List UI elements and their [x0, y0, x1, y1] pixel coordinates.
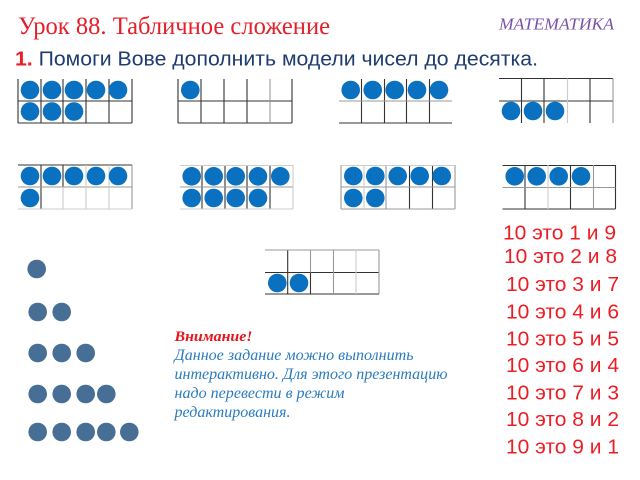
ten frame 2: 1 counter — [178, 79, 292, 123]
number bonds of ten list: 10 это 5 и 5 — [506, 328, 619, 350]
ten frame 5: 6 counters — [18, 165, 132, 209]
ten frame 3: 5 counters — [339, 79, 452, 123]
number bonds of ten list: 10 это 3 и 7 — [506, 273, 619, 296]
number bonds of ten list: 10 это 7 и 3 — [506, 382, 619, 404]
ten frame 8: 4 counters — [502, 165, 616, 209]
attention note: Данное задание можно выполнить — [172, 347, 414, 364]
attention note — [172, 329, 448, 421]
number bonds of ten list: 10 это 6 и 4 — [506, 354, 619, 377]
subject label: МАТЕМАТИКА — [498, 14, 615, 34]
ten frame 7: 7 counters — [341, 165, 455, 209]
number bonds of ten list — [503, 222, 619, 458]
ten frame 9: 2 counters — [265, 250, 379, 294]
attention note: интерактивно. Для этого презентацию — [174, 366, 448, 383]
number bonds of ten list: 10 это 2 и 8 — [504, 245, 617, 268]
task instruction: 1. Помоги Вове дополнить модели чисел до десятка. — [15, 48, 538, 70]
counting dots pyramid — [27, 260, 139, 441]
number bonds of ten list: 10 это 8 и 2 — [506, 408, 619, 431]
attention note: Внимание! — [173, 329, 252, 345]
ten frame 6: 9 counters — [180, 165, 293, 209]
number bonds of ten list: 10 это 9 и 1 — [506, 436, 619, 458]
ten frame 4: 3 counters — [499, 78, 613, 123]
number bonds of ten list: 10 это 1 и 9 — [503, 222, 616, 244]
attention note: редактирования. — [173, 404, 290, 421]
attention note: надо перевести в режим — [174, 385, 344, 402]
title: Урок 88. Табличное сложение — [18, 13, 330, 40]
number bonds of ten list: 10 это 4 и 6 — [506, 300, 619, 324]
ten frame 1: 8 counters — [18, 79, 132, 123]
